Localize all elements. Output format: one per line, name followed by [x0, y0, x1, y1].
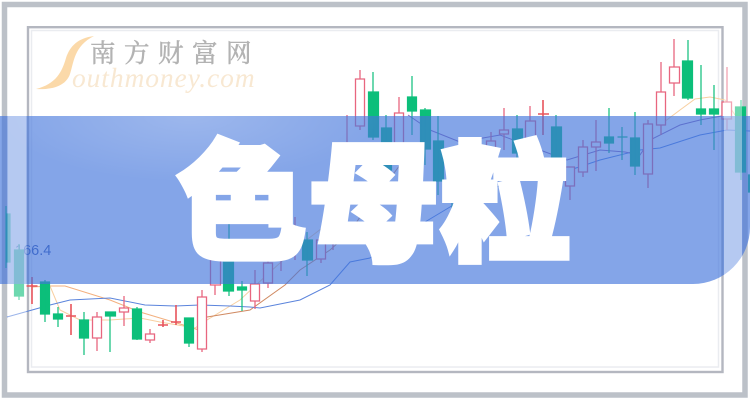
- watermark url: outhmoney.com: [72, 62, 256, 93]
- title text: 粒: [441, 134, 570, 278]
- watermark chinese name: 南方财富网: [90, 34, 260, 70]
- falling green candles: [6, 40, 750, 355]
- banner background: [0, 116, 750, 284]
- watermark logo: southmoney: [36, 34, 260, 93]
- icon: S swoosh: [36, 36, 94, 89]
- rising red candles: [92, 39, 732, 352]
- title text: 母: [309, 134, 438, 278]
- inner frame: [28, 27, 722, 372]
- title text: 色: [177, 133, 306, 277]
- title banner: [0, 116, 750, 284]
- title text: [177, 133, 570, 278]
- candlestick chart: [6, 39, 750, 355]
- axis value label: 166.4: [15, 243, 51, 259]
- red doji candles: [26, 100, 549, 335]
- banner highlight: [0, 116, 750, 284]
- moving average lines: [7, 97, 750, 333]
